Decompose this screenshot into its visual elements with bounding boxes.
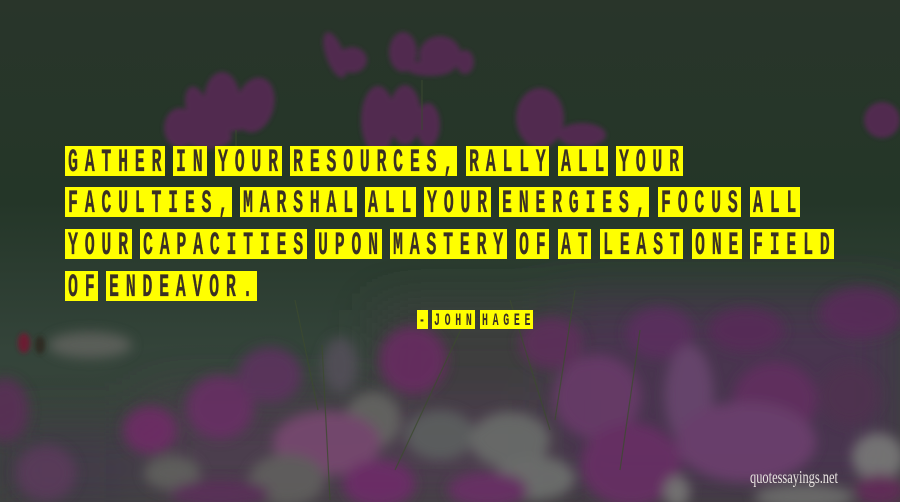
attribution: John Hagee: - [419, 311, 430, 331]
word: YOUR: YOUR [427, 186, 494, 222]
word: ENDEAVOR.: ENDEAVOR. [109, 270, 259, 306]
word: FOCUS: FOCUS [661, 186, 744, 222]
flowers: lower meadow blossoms [0, 287, 900, 502]
red buds [18, 333, 45, 354]
word: MASTERY: MASTERY [393, 228, 510, 264]
quote text [65, 145, 836, 306]
word: IN: IN [176, 145, 209, 181]
attribution: John Hagee [417, 310, 535, 331]
word: FACULTIES,: FACULTIES, [68, 186, 235, 222]
word: ALL: ALL [368, 186, 418, 222]
word: RALLY: RALLY [469, 145, 552, 181]
word: AT: AT [561, 228, 594, 264]
word: FIELD: FIELD [753, 228, 836, 264]
word: LEAST: LEAST [603, 228, 686, 264]
word: UPON: UPON [318, 228, 385, 264]
meadow colour wash [0, 300, 900, 502]
word: OF: OF [519, 228, 552, 264]
attribution: John Hagee: HAGEE [482, 311, 535, 331]
word: ENERGIES,: ENERGIES, [502, 186, 652, 222]
word: MARSHAL: MARSHAL [243, 186, 360, 222]
word: OF: OF [68, 270, 101, 306]
word: RESOURCES,: RESOURCES, [293, 145, 460, 181]
word: ONE: ONE [695, 228, 745, 264]
word: GATHER: GATHER [68, 145, 168, 181]
watermark: quotessayings.net [750, 467, 838, 487]
word: CAPACITIES: CAPACITIES [143, 228, 310, 264]
word: ALL: ALL [561, 145, 611, 181]
word: YOUR: YOUR [68, 228, 135, 264]
attribution: John Hagee: JOHN [434, 311, 476, 331]
flowers: upper blossoms [164, 29, 900, 154]
word: YOUR: YOUR [218, 145, 285, 181]
word: ALL: ALL [753, 186, 803, 222]
word: YOUR: YOUR [619, 145, 686, 181]
flower stems [236, 80, 640, 500]
